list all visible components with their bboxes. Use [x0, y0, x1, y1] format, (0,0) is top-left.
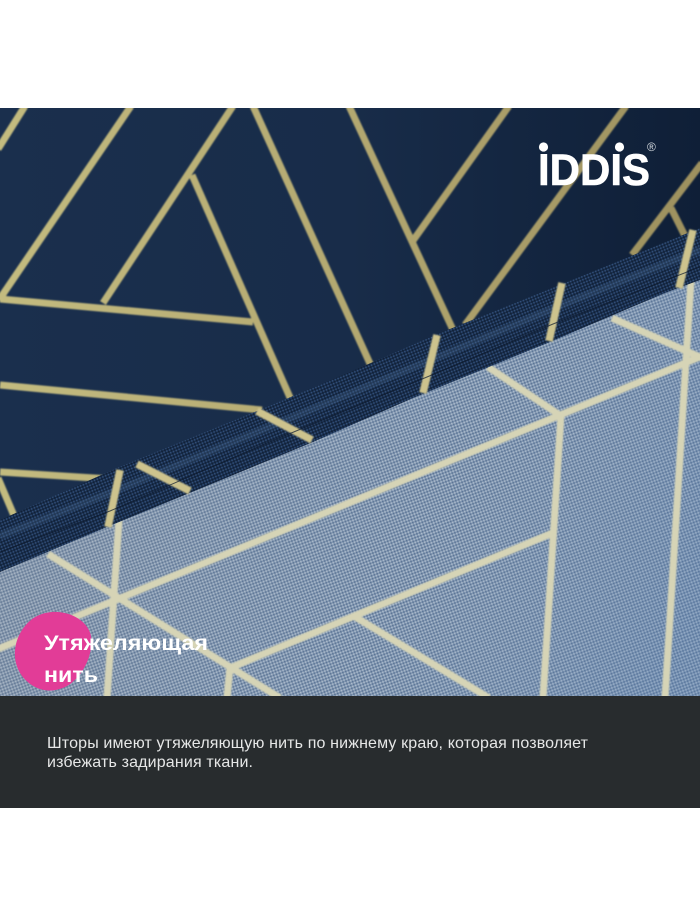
hem highlight: [0, 250, 700, 536]
iddis logo: [538, 140, 656, 195]
navy curtain face: [0, 108, 700, 520]
gold geometric lines on navy fabric: [0, 106, 700, 518]
caption text: избежать задирания ткани.: [47, 754, 253, 771]
dark caption band: [0, 696, 700, 808]
hem seam shadow: [0, 267, 700, 552]
gold stripes on the hem: [108, 230, 693, 527]
light reverse side of the curtain: [0, 265, 700, 700]
logo wordmark: IDDIS: [538, 146, 650, 195]
logo dot second i: [615, 142, 624, 152]
pink badge blob: [15, 612, 92, 691]
logo dot first i: [539, 142, 548, 152]
light fabric shading: [0, 265, 700, 700]
badge title: Утяжеляющая: [44, 632, 208, 655]
registered mark: ®: [647, 140, 656, 154]
hem upper roll: [0, 228, 700, 562]
weighted hem: fold band: [0, 228, 700, 572]
photo: curtain fabric: [0, 106, 700, 700]
cream geometric lines on light fabric: [0, 280, 700, 698]
hem lower seam: [0, 291, 670, 572]
badge title: нить: [44, 664, 98, 687]
caption text: Шторы имеют утяжеляющую нить по нижнему краю, которая позволяет: [47, 735, 589, 752]
